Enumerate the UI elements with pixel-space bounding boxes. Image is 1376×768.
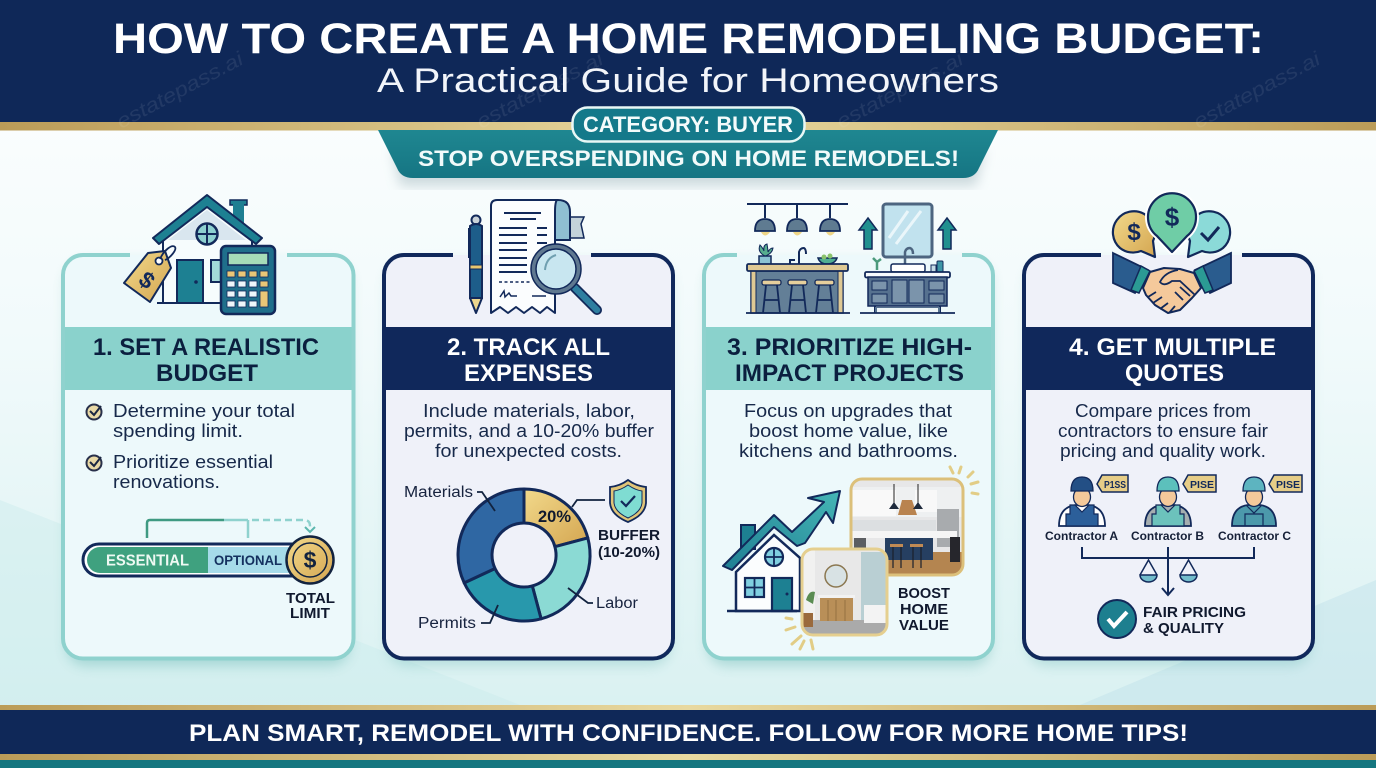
panel: step 3 prioritize high-impact projects (704, 204, 993, 666)
icon: kitchen island (746, 204, 850, 313)
description: contractors to ensure fair (1058, 420, 1268, 441)
icon: speech bubbles and handshake: $ (1127, 219, 1141, 246)
header band (0, 0, 1376, 130)
description: permits, and a 10-20% buffer (404, 420, 654, 441)
description: Compare prices from (1075, 400, 1251, 421)
budget bar: ESSENTIAL (106, 552, 189, 570)
label: boost home value: BOOST (898, 585, 950, 602)
description: kitchens and bathrooms. (739, 440, 958, 461)
icon: shield (610, 480, 646, 522)
photo: bathroom (802, 549, 888, 635)
checklist: renovations. (113, 471, 220, 492)
description (739, 400, 958, 461)
title: HOW TO CREATE A HOME REMODELING BUDGET: (113, 15, 1264, 63)
checklist (86, 400, 295, 492)
heading: 3. PRIORITIZE HIGH- (727, 334, 972, 361)
sparkles (786, 467, 978, 649)
donut chart: 20% (538, 508, 571, 526)
donut chart: BUFFER (598, 527, 660, 544)
donut chart: Labor (596, 595, 638, 612)
description (404, 400, 654, 461)
heading (447, 334, 610, 387)
label: boost home value: HOME (900, 601, 948, 618)
banner: stop overspending: STOP OVERSPENDING ON HOME REMODELS! (418, 146, 959, 171)
photo: kitchen (851, 479, 963, 575)
heading: 4. GET MULTIPLE (1069, 334, 1276, 361)
label: fair pricing (1143, 604, 1246, 637)
call to action: PLAN SMART, REMODEL WITH CONFIDENCE. FOLLOW FOR MORE HOME TIPS! (189, 720, 1188, 747)
watermarks: estatepass.ai (113, 48, 248, 133)
heading (727, 334, 972, 387)
watermarks: estatepass.ai (1190, 48, 1325, 133)
contractor B: PISE (1190, 480, 1214, 491)
heading (93, 334, 319, 387)
heading: QUOTES (1125, 360, 1224, 387)
description (1058, 400, 1268, 461)
panel: step 1 set a realistic budget (63, 195, 354, 666)
contractor C: Contractor C (1218, 531, 1291, 543)
icon: check badge (1098, 600, 1136, 638)
icon: bathroom vanity (859, 204, 956, 313)
donut chart: (10-20%) (598, 544, 660, 561)
budget bar: LIMIT (290, 605, 330, 622)
banner: stop overspending (378, 130, 998, 186)
watermarks (113, 48, 1325, 133)
watermarks: estatepass.ai (473, 48, 608, 133)
panel: step 2 track all expenses (384, 200, 673, 666)
contractor C (1218, 475, 1302, 543)
description: Focus on upgrades that (744, 400, 952, 421)
label: fair pricing: & QUALITY (1143, 620, 1224, 637)
label: boost home value: VALUE (899, 617, 949, 634)
contractor B: Contractor B (1131, 531, 1204, 543)
checklist: Determine your total (113, 400, 295, 421)
heading: 1. SET A REALISTIC (93, 334, 319, 361)
footer band (0, 705, 1376, 768)
icon: receipt pen magnifier (469, 200, 597, 313)
description: boost home value, like (749, 420, 948, 441)
donut chart: Permits (418, 615, 476, 632)
subtitle: A Practical Guide for Homeowners (377, 62, 999, 100)
contractor A: Contractor A (1045, 531, 1118, 543)
budget bar: $ (304, 547, 317, 573)
icon: house with rising arrow (723, 491, 840, 611)
description: for unexpected costs. (435, 440, 622, 461)
heading: BUDGET (156, 360, 258, 387)
label: boost home value (898, 585, 950, 634)
checklist: Prioritize essential (113, 451, 273, 472)
icon: house with tag and calculator: $ (134, 266, 160, 294)
budget bar: OPTIONAL (214, 553, 282, 568)
panel: step 4 get multiple quotes (1024, 193, 1313, 666)
heading: 2. TRACK ALL (447, 334, 610, 361)
budget bar (83, 520, 335, 622)
contractor A: P1SS (1104, 480, 1126, 491)
heading: EXPENSES (464, 360, 593, 387)
description: Include materials, labor, (423, 400, 635, 421)
heading (1069, 334, 1276, 387)
checklist: spending limit. (113, 420, 243, 441)
contractor B (1131, 475, 1216, 543)
icon: house with tag and calculator (124, 195, 275, 314)
heading: IMPACT PROJECTS (735, 360, 964, 387)
donut chart: Materials (404, 484, 473, 501)
contractor A (1045, 475, 1128, 543)
contractor C: PISE (1276, 480, 1300, 491)
category pill (572, 108, 804, 142)
category pill: CATEGORY: BUYER (583, 112, 793, 137)
label: fair pricing: FAIR PRICING (1143, 604, 1246, 621)
icon: speech bubbles and handshake (1113, 193, 1231, 313)
watermarks: estatepass.ai (833, 48, 968, 133)
icon: speech bubbles and handshake: $ (1165, 202, 1180, 232)
donut chart (404, 480, 660, 632)
budget bar: TOTAL (286, 590, 335, 607)
comparison bracket and scales (1082, 547, 1254, 595)
description: pricing and quality work. (1060, 440, 1266, 461)
